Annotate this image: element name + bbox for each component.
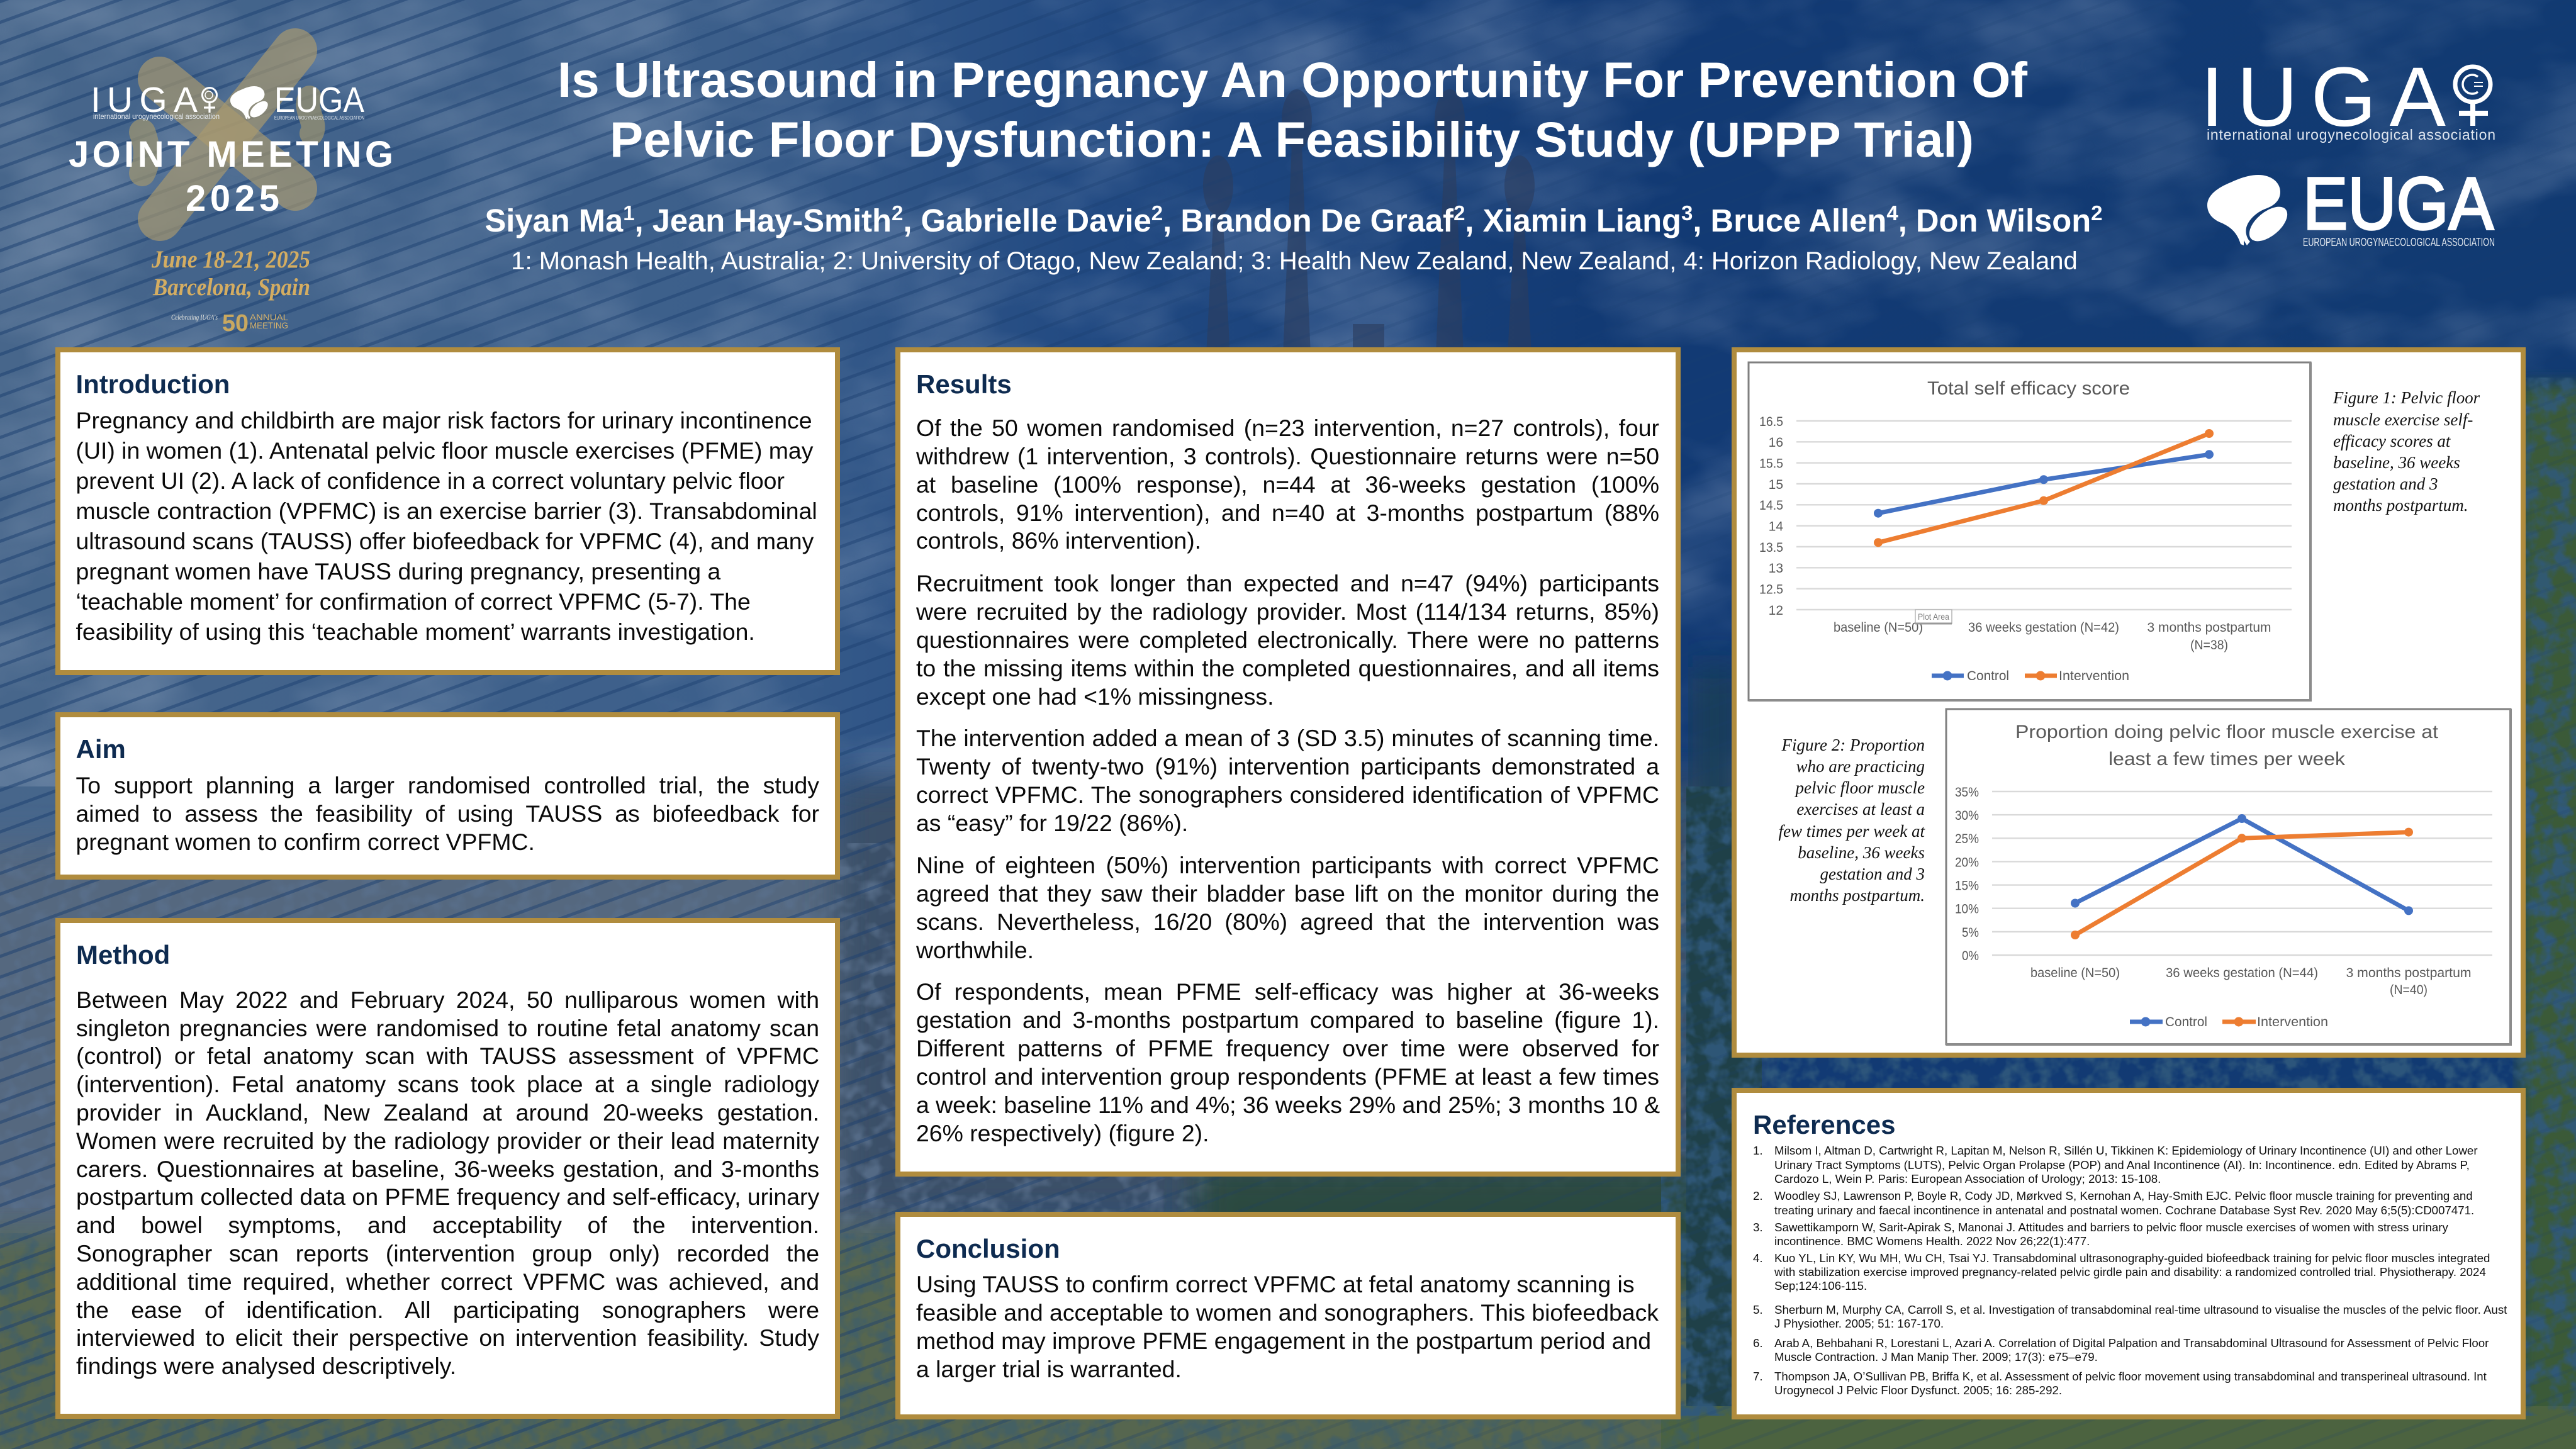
caption: figure 1: efficacy scores at — [2333, 432, 2451, 450]
authors: , Don Wilson — [1898, 203, 2091, 238]
text block: method: Sonographer scan reports (intervention group only) recorded the — [76, 1240, 819, 1267]
y axis labels: 16 — [1769, 435, 1783, 450]
heading: introduction: Introduction — [76, 369, 230, 399]
text block: introduction: muscle contraction (VPFMC) is an exercise barrier (3). Transabdominal — [76, 498, 817, 524]
y axis labels: 20% — [1955, 856, 1979, 870]
buildings left — [0, 843, 906, 1246]
heading: 2025: 2025 — [186, 178, 279, 219]
series: control — [1874, 450, 2214, 518]
reference list: Sep;124:106-115. — [1774, 1279, 1867, 1292]
authors: 2 — [892, 201, 903, 225]
reference list: 5. — [1753, 1302, 1763, 1316]
text block: results paragraph 1: withdrew (1 intervention, 3 controls). Questionnaire returns were n=50 — [916, 443, 1659, 469]
y axis labels: 15.5 — [1759, 457, 1783, 471]
text block: conclusion: method may improve PFME engagement in the postpartum period and — [916, 1328, 1651, 1354]
legend: Control — [1967, 669, 2009, 683]
reference list: Sherburn M, Murphy CA, Carroll S, et al. Investigation of transabdominal real-time ultrasound to visualise the muscles of the pelvic floor. Aust — [1774, 1302, 2507, 1316]
reference list — [1753, 1144, 2507, 1397]
x axis labels: 3 months postpartum — [2346, 966, 2472, 980]
text block: results paragraph 3: The intervention added a mean of 3 (SD 3.5) minutes of scanning time. — [916, 725, 1659, 751]
towers — [1203, 89, 1535, 355]
caption: figure 1: muscle exercise self- — [2333, 410, 2473, 429]
authors: , Brandon De Graaf — [1163, 203, 1453, 238]
text block: results paragraph 1 — [916, 415, 1659, 554]
text block: results paragraph 2: to the missing items within the completed questionnaires, and all items — [916, 655, 1659, 681]
text block: results paragraph 3 — [916, 725, 1660, 836]
title: Is Ultrasound in Pregnancy An Opportunity For Prevention Of — [557, 52, 2028, 108]
reference list: 7. — [1753, 1370, 1763, 1383]
reference list: treating urinary and faecal incontinence in antenatal and postnatal women. Cochrane Database Syst Rev. 2020 May 6;5(5):CD007471. — [1774, 1203, 2474, 1217]
text block: results paragraph 5: Different patterns of PFME frequency over time were observed for — [916, 1035, 1659, 1061]
y axis labels: 25% — [1955, 832, 1979, 846]
authors: 4 — [1886, 201, 1898, 225]
authors: 1 — [623, 201, 635, 225]
text block: results paragraph 1: at baseline (100% response), n=44 at 36-weeks gestation (100% — [916, 471, 1659, 498]
text block: aim — [76, 772, 819, 855]
affiliations: 1: Monash Health, Australia; 2: University of Otago, New Zealand; 3: Health New Zealand, New Zealand, 4: Horizon Radiology, New Zealand — [511, 247, 2078, 275]
x axis labels — [1834, 620, 2271, 652]
reference list: Woodley SJ, Lawrenson P, Boyle R, Cody JD, Mørkved S, Kernohan A, Hay-Smith EJC. Pelvic floor muscle training for preventing and — [1774, 1189, 2473, 1202]
text block: aim: aimed to assess the feasibility of using TAUSS as biofeedback for — [76, 800, 819, 827]
y axis labels: 12.5 — [1759, 583, 1783, 596]
reference list: incontinence. BMC Womens Health. 2022 Nov 26;22(1):477. — [1774, 1234, 2090, 1247]
text block: introduction — [76, 407, 817, 645]
y axis labels: 14.5 — [1759, 498, 1783, 513]
y axis labels: 14 — [1769, 520, 1783, 534]
green lower area — [0, 1233, 1787, 1449]
text: place: Barcelona, Spain — [152, 274, 310, 301]
text block: results paragraph 3: correct VPFMC. The sonographers considered identification of VPFMC — [916, 781, 1659, 808]
icon: female symbol — [2455, 67, 2490, 126]
text block: introduction: (UI) in women (1). Antenatal pelvic floor muscle exercises (PFME) may — [76, 437, 813, 464]
heading: aim: Aim — [76, 734, 126, 764]
x axis labels: 3 months postpartum — [2147, 620, 2271, 635]
text block: method: postpartum collected data on PFME frequency and self-efficacy, urinary — [76, 1183, 819, 1210]
panel: introduction — [55, 347, 840, 675]
text block: method — [76, 987, 819, 1379]
text block: conclusion — [916, 1271, 1659, 1382]
text block: method: the ease of identification. All participating sonographers were — [76, 1297, 819, 1323]
text block: results paragraph 5: 26% respectively) (figure 2). — [916, 1120, 1209, 1146]
y axis labels — [1955, 785, 1979, 963]
text block: conclusion: a larger trial is warranted. — [916, 1356, 1182, 1382]
caption: figure 2: few times per week at — [1779, 822, 1925, 841]
wordmark: IUGA small tagline: international urogynecological association — [93, 112, 220, 121]
text block: method: singleton pregnancies were randomised to routine fetal anatomy scan — [76, 1015, 819, 1041]
reference list: J Physiother. 2005; 51: 167-170. — [1774, 1317, 1944, 1330]
caption: figure 2: baseline, 36 weeks — [1798, 843, 1925, 862]
heading: references: References — [1753, 1110, 1895, 1139]
y axis labels: 13 — [1769, 561, 1783, 576]
text block: method: (intervention). Fetal anatomy scans took place at a single radiology — [76, 1071, 819, 1097]
text block: conclusion: feasible and acceptable to women and sonographers. This biofeedback — [916, 1299, 1659, 1326]
y axis labels: 35% — [1955, 785, 1979, 800]
legend — [2130, 1015, 2328, 1029]
text block: results paragraph 3: Twenty of twenty-two (91%) intervention participants demonstrated a — [916, 753, 1659, 780]
tooltip: plot area: Plot Area — [1918, 612, 1949, 622]
x axis labels — [2030, 966, 2472, 997]
reference list: Urinary Tract Symptoms (LUTS), Pelvic Organ Prolapse (POP) and Anal Incontinence (AI). In: Incontinence. edn. Edited by Abrams P, — [1774, 1158, 2470, 1172]
heading: conclusion: Conclusion — [916, 1233, 1060, 1263]
text block: introduction: ultrasound scans (TAUSS) offer biofeedback for VPFMC (4), and many — [76, 528, 814, 554]
caption: figure 1: baseline, 36 weeks — [2333, 453, 2460, 472]
caption: figure 2: exercises at least a — [1796, 800, 1925, 819]
wordmark: tagline: EUROPEAN UROGYNAECOLOGICAL ASSOCIATION — [2303, 236, 2495, 249]
x axis labels: 36 weeks gestation (N=42) — [1968, 620, 2119, 635]
text block: results paragraph 2: except one had <1% missingness. — [916, 683, 1274, 710]
caption: figure 1: Figure 1: Pelvic floor — [2332, 388, 2480, 407]
text block: results paragraph 5: Of respondents, mean PFME self-efficacy was higher at 36-weeks — [916, 978, 1659, 1005]
x axis labels: baseline (N=50) — [1834, 620, 1923, 635]
panel: figures — [1732, 347, 2526, 1058]
title — [557, 52, 2028, 167]
legend: Intervention — [2059, 669, 2129, 683]
caption: figure 2: who are practicing — [1796, 757, 1925, 776]
y axis labels: 5% — [1962, 926, 1979, 940]
icon: small bladder — [230, 86, 271, 120]
caption: figure 1: months postpartum. — [2333, 496, 2468, 515]
caption: figure 2: months postpartum. — [1789, 886, 1925, 905]
text block: aim: To support planning a larger randomised controlled trial, the study — [76, 772, 819, 798]
text block: results paragraph 2 — [916, 570, 1659, 710]
caption: figure 1: gestation and 3 — [2333, 474, 2438, 493]
text block: method: Between May 2022 and February 2024, 50 nulliparous women with — [76, 987, 819, 1013]
text block: results paragraph 5: gestation and 3-months postpartum compared to baseline (figure 1). — [916, 1007, 1659, 1033]
text block: method: (control) or fetal anatomy scan with TAUSS assessment of VPFMC — [76, 1043, 819, 1069]
text block: results paragraph 4: Nine of eighteen (50%) intervention participants with correct VPFMC — [916, 852, 1659, 878]
text block: results paragraph 1: controls, 91% intervention), and n=40 at 3-months postpartum (88% — [916, 500, 1659, 526]
panel: conclusion — [895, 1212, 1681, 1419]
wordmark: IUGA small: IUGA — [91, 80, 198, 120]
panel: results — [895, 347, 1681, 1177]
authors: 3 — [1681, 201, 1693, 225]
text block: introduction: Pregnancy and childbirth are major risk factors for urinary incontinence — [76, 407, 812, 434]
text block: results paragraph 5: a week: baseline 11% and 4%; 36 weeks 29% and 25%; 3 months 10 & — [916, 1092, 1660, 1118]
reference list: 2. — [1753, 1189, 1763, 1202]
authors: , Bruce Allen — [1693, 203, 1886, 238]
legend: Intervention — [2257, 1015, 2328, 1029]
authors: , Jean Hay-Smith — [635, 203, 892, 238]
text block: results paragraph 5: control and intervention group respondents (PFME at least a few times — [916, 1063, 1659, 1090]
heading: method: Method — [76, 940, 170, 970]
authors: 2 — [2091, 201, 2103, 225]
reference list: Sawettikamporn W, Sarit-Apirak S, Manonai J. Attitudes and barriers to pelvic floor muscle exercises of women with stress urinary — [1774, 1221, 2448, 1233]
reference list: 4. — [1753, 1251, 1763, 1265]
legend — [1932, 669, 2129, 683]
y axis labels: 10% — [1955, 902, 1979, 916]
chart title: Proportion doing pelvic floor muscle exercise at — [2015, 722, 2439, 742]
text: annual meeting — [250, 312, 288, 330]
x axis labels: (N=38) — [2190, 638, 2228, 652]
reference list: with stabilization exercise improved pregnancy-related pelvic girdle pain and disability: a randomized controlled trial. Physiotherapy. 2024 — [1774, 1265, 2486, 1278]
y axis labels: 15% — [1955, 878, 1979, 893]
text block: conclusion: Using TAUSS to confirm correct VPFMC at fetal anatomy scanning is — [916, 1271, 1635, 1297]
text block: results paragraph 4: scans. Nevertheless, 16/20 (80%) agreed that the intervention was — [916, 909, 1659, 935]
chart: total self efficacy score — [1749, 362, 2310, 700]
text block: results paragraph 1: controls, 86% intervention). — [916, 527, 1201, 554]
text block: results paragraph 3: as “easy” for 19/22 (86%). — [916, 810, 1188, 836]
panel: references — [1732, 1088, 2526, 1419]
caption: figure 2: Figure 2: Proportion — [1781, 736, 1925, 754]
x axis labels: 36 weeks gestation (N=44) — [2166, 966, 2318, 980]
panel: method — [55, 918, 840, 1419]
text block: aim: pregnant women to confirm correct VPFMC. — [76, 829, 535, 855]
text block: method: carers. Questionnaires at baseline, 36-weeks gestation, and 3-months — [76, 1156, 819, 1182]
text block: results paragraph 1: Of the 50 women randomised (n=23 intervention, n=27 controls), four — [916, 415, 1659, 441]
text block: results paragraph 4 — [916, 852, 1659, 963]
text block: method: findings were analysed descriptively. — [76, 1353, 456, 1379]
caption: figure 1 — [2332, 388, 2480, 515]
icon: gold X emblem — [142, 50, 313, 219]
wordmark: EUGA small: EUGA — [274, 80, 364, 120]
text: annual meeting: MEETING — [250, 320, 288, 330]
text block: method: interviewed to elicit their perspective on intervention feasibility. Study — [76, 1324, 819, 1351]
text block: results paragraph 2: were recruited by the radiology provider. Most (114/134 returns, 85%) — [916, 598, 1659, 625]
icon: bladder — [2207, 175, 2293, 248]
chart title: least a few times per week — [2108, 749, 2346, 769]
chart title — [2015, 722, 2439, 769]
caption: figure 2: pelvic floor muscle — [1795, 778, 1925, 797]
heading: results: Results — [916, 369, 1012, 399]
authors: , Gabrielle Davie — [903, 203, 1151, 238]
text block: method: provider in Auckland, New Zealand at around 20-weeks gestation. — [76, 1099, 819, 1126]
wordmark: EUGA: EUGA — [2303, 162, 2494, 245]
legend: Control — [2165, 1015, 2207, 1029]
y axis labels: 13.5 — [1759, 540, 1783, 555]
text block: results paragraph 4: agreed that they saw their bladder base lift on the monitor during the — [916, 880, 1659, 907]
reference list: 3. — [1753, 1221, 1763, 1233]
wordmark: tagline: international urogynecological association — [2207, 126, 2495, 143]
authors: 2 — [1151, 201, 1163, 225]
authors: 2 — [1453, 201, 1465, 225]
authors: , Xiamin Liang — [1465, 203, 1681, 238]
title: Pelvic Floor Dysfunction: A Feasibility Study (UPPP Trial) — [610, 111, 1974, 167]
text block: introduction: ‘teachable moment’ for confirmation of correct VPFMC (5-7). The — [76, 588, 751, 615]
reference list: Thompson JA, O’Sullivan PB, Briffa K, et al. Assessment of pelvic floor movement using transabdominal and transperineal ultrasound. Int — [1774, 1370, 2487, 1383]
text block: results paragraph 2: Recruitment took longer than expected and n=47 (94%) participants — [916, 570, 1659, 596]
reference list: 1. — [1753, 1144, 1763, 1157]
heading: joint meeting: JOINT MEETING — [69, 134, 393, 175]
reference list: Arab A, Behbahani R, Lorestani L, Azari A. Correlation of Digital Palpation and Transabdominal Ultrasound for Assessment of Pelvic Floor — [1774, 1336, 2489, 1350]
text: annual meeting: ANNUAL — [250, 312, 288, 322]
tooltip: plot area — [1915, 610, 1952, 624]
y axis labels: 30% — [1955, 808, 1979, 823]
reference list: Cardozo L, Wein P. Paris: European Association of Urology; 2013: 15-108. — [1774, 1172, 2161, 1185]
text block: method: additional time required, whether correct VPFMC was achieved, and — [76, 1268, 819, 1295]
y axis labels: 16.5 — [1759, 415, 1783, 429]
text block: introduction: feasibility of using this ‘teachable moment’ warrants investigation. — [76, 618, 755, 645]
reference list: 6. — [1753, 1336, 1763, 1350]
joint meeting logo — [69, 50, 393, 337]
text block: method: and bowel symptoms, and acceptability of the intervention. — [76, 1212, 819, 1238]
y axis labels: 12 — [1769, 603, 1783, 618]
text block: results paragraph 4: worthwhile. — [916, 937, 1034, 963]
x axis labels: baseline (N=50) — [2030, 966, 2120, 980]
text: celebrating: Celebrating IUGA's — [171, 313, 218, 322]
EUGA logo — [2207, 162, 2495, 249]
IUGA logo — [2200, 50, 2495, 144]
reference list: Kuo YL, Lin KY, Wu MH, Wu CH, Tsai YJ. Transabdominal ultrasonography-guided biofeedback training for pelvic floor muscles integrated — [1774, 1251, 2490, 1265]
panel: aim — [55, 712, 840, 880]
wordmark: IUGA: IUGA — [2200, 50, 2446, 144]
text block: results paragraph 5 — [916, 978, 1660, 1146]
text block: results paragraph 2: questionnaires were completed electronically. There were no patterns — [916, 627, 1659, 653]
text block: introduction: prevent UI (2). A lack of confidence in a correct voluntary pelvic floor — [76, 467, 785, 494]
caption: figure 2: gestation and 3 — [1820, 864, 1925, 883]
reference list: Muscle Contraction. J Man Manip Ther. 2009; 17(3): e75–e79. — [1774, 1350, 2098, 1363]
series: intervention — [1874, 429, 2214, 547]
icon: small female symbol — [203, 88, 216, 113]
text block: method: Women were recruited by the radiology provider or their lead maternity — [76, 1127, 819, 1154]
text: 50: 50 — [222, 310, 249, 337]
text block: introduction: pregnant women have TAUSS during pregnancy, presenting a — [76, 558, 720, 585]
y axis labels — [1759, 415, 1783, 618]
right foliage — [1693, 667, 1737, 1449]
reference list: Milsom I, Altman D, Cartwright R, Lapitan M, Nelson R, Sillén U, Tikkinen K: Epidemiology of Urinary Incontinence (UI) and other Lower — [1774, 1144, 2478, 1157]
series: control — [2071, 814, 2413, 915]
caption: figure 2 — [1779, 736, 1925, 905]
chart: proportion doing pelvic floor muscle exercise — [1946, 709, 2511, 1044]
y axis labels: 15 — [1769, 478, 1783, 492]
x axis labels: (N=40) — [2390, 983, 2428, 997]
reference list: Urogynecol J Pelvic Floor Dysfunct. 2005; 16: 285-292. — [1774, 1384, 2062, 1397]
wordmark: EUGA small tagline: EUROPEAN UROGYNAECOLOGICAL ASSOCIATION — [274, 115, 364, 121]
y axis labels: 0% — [1962, 949, 1979, 963]
authors: Siyan Ma — [484, 203, 623, 238]
text: date: June 18-21, 2025 — [151, 246, 310, 273]
series: intervention — [2071, 828, 2413, 939]
chart title: Total self efficacy score — [1927, 378, 2130, 399]
